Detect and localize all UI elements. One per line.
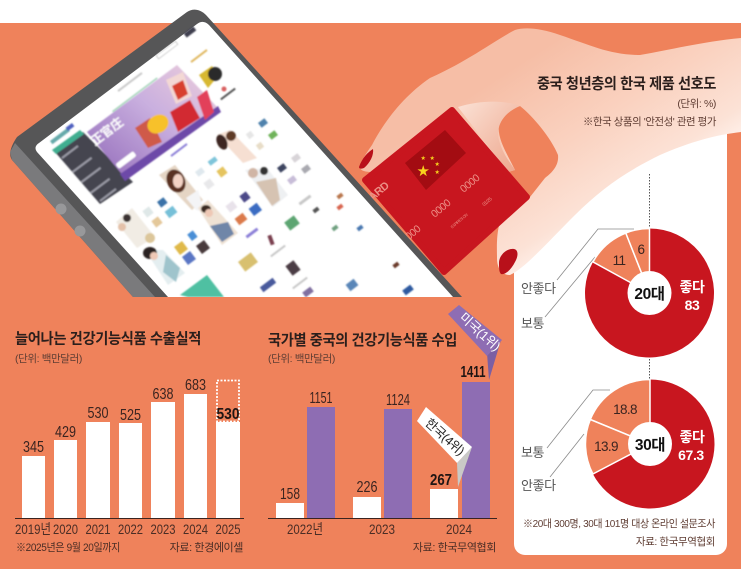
heading: preference: 중국 청년층의 한국 제품 선호도 <box>537 76 717 92</box>
bar values: exports: 345 <box>23 439 44 456</box>
category labels: 안좋다 <box>521 281 556 296</box>
slice: neutral 18.8 <box>590 380 650 444</box>
side buttons <box>56 204 66 214</box>
donut hole <box>628 422 672 466</box>
slice values: 67.3 <box>678 447 704 463</box>
green promo box <box>180 275 224 297</box>
screen contents <box>50 26 414 297</box>
card text: EXPIRES ON <box>450 212 469 229</box>
bar values: exports: 683 <box>185 377 206 394</box>
fingernails <box>359 149 373 169</box>
year labels: exports: 2021 <box>86 521 111 537</box>
product photos: packages <box>142 118 414 297</box>
card text: 0000 <box>458 172 483 195</box>
panel: exports chart <box>15 330 244 554</box>
unit: preference: (단위: %) <box>677 97 716 110</box>
donut: thirties <box>521 380 714 508</box>
bar values: imports: 158 <box>280 486 300 503</box>
slice: bad 13.9 <box>585 420 650 474</box>
slice values <box>613 242 705 313</box>
panel: preference heading <box>537 76 717 128</box>
featured product <box>199 66 218 88</box>
screen <box>36 22 453 297</box>
bars: Korea <box>276 489 458 518</box>
red credit card <box>365 110 527 272</box>
source: imports: 자료: 한국무역협회 <box>413 541 496 554</box>
bars: exports <box>22 394 240 518</box>
axis: imports <box>268 518 497 519</box>
hand <box>360 28 741 275</box>
card flag <box>405 130 466 190</box>
year labels: exports: 2022 <box>118 521 143 537</box>
bar values: imports: 1411 <box>460 364 486 381</box>
illustration: hand holding card <box>359 28 741 275</box>
panel: export chart background <box>0 297 514 569</box>
bar values: imports <box>280 364 486 503</box>
slice values: 11 <box>613 253 625 268</box>
tablet body <box>10 10 462 297</box>
dark category menu <box>55 132 133 204</box>
ribbon: USA rank 1: 미국(1위) <box>457 310 503 354</box>
card text <box>367 172 494 246</box>
card text: 0000 <box>399 223 424 246</box>
slice values: 좋다 <box>680 429 705 445</box>
ribbon: Korea rank 4 <box>417 407 472 487</box>
slice: neutral 11 <box>593 233 650 293</box>
year labels: exports: 2023 <box>150 521 176 537</box>
screen header <box>50 26 196 144</box>
center label: 20대 <box>634 285 665 303</box>
category labels: 보통 <box>521 445 545 460</box>
bars: USA <box>307 382 490 518</box>
illustration: tablet showing shopping site <box>10 10 462 297</box>
category labels <box>521 445 556 493</box>
ribbon: USA rank 1 <box>448 305 503 380</box>
bar values: exports: 429 <box>55 424 76 441</box>
bar values: exports: 530 <box>88 405 109 422</box>
folded finger <box>458 102 520 172</box>
bar values: exports <box>23 377 240 456</box>
leader lines: twenties <box>545 229 634 317</box>
dotted connector lines <box>648 174 650 379</box>
bar values: exports: 525 <box>120 407 141 424</box>
banner brand text: 正官庄 <box>86 112 126 149</box>
card flag: ★ <box>416 162 430 180</box>
year labels: imports: 2023 <box>369 521 395 537</box>
year labels: imports <box>287 521 472 537</box>
card flag: ★ <box>435 169 440 176</box>
bar values: exports: 638 <box>152 386 174 403</box>
panel: imports chart <box>268 305 503 554</box>
year labels: exports: 2024 <box>183 521 208 537</box>
note: preference: ※한국 상품의 '안전성' 관련 평가 <box>583 116 717 128</box>
year labels: exports: 2019년 <box>15 521 51 537</box>
category labels <box>521 281 556 331</box>
source: exports: 자료: 한경에이셀 <box>170 541 243 554</box>
leader lines: thirties <box>547 390 610 477</box>
purple banner <box>87 65 220 178</box>
card text: ARD <box>367 180 392 204</box>
ribbon: Korea rank 4: 한국(4위) <box>422 416 467 458</box>
heading: exports: 늘어나는 건강기능식품 수출실적 <box>15 330 201 348</box>
donut hole <box>628 271 672 315</box>
slice: good 83 <box>585 228 714 358</box>
source: survey: 자료: 한국무역협회 <box>636 535 715 548</box>
center label: 30대 <box>635 436 665 454</box>
slice values: 6 <box>638 242 645 257</box>
card text: 0000 <box>429 197 454 220</box>
bar values: imports: 267 <box>430 472 452 489</box>
footnote: survey: ※20대 300명, 30대 101명 대상 온라인 설문조사 <box>523 518 716 530</box>
slice values: 13.9 <box>594 439 618 454</box>
year labels: exports: 2025 <box>216 521 241 537</box>
card flag: ★ <box>421 155 426 162</box>
slice values: 83 <box>685 297 700 313</box>
slice values <box>594 402 705 463</box>
slice values: 18.8 <box>613 402 637 417</box>
white survey panel <box>514 110 727 555</box>
banner mascot <box>144 111 172 137</box>
slice values: 좋다 <box>680 279 705 295</box>
year labels: exports: 2020 <box>53 521 78 537</box>
dashed bar outline: full year <box>217 380 239 422</box>
unit: imports: (단위: 백만달러) <box>268 352 335 365</box>
bar values: imports: 226 <box>356 479 378 496</box>
axis: exports <box>15 518 244 519</box>
donut: twenties <box>521 228 714 358</box>
year labels: imports: 2022년 <box>287 521 323 537</box>
card flag: ★ <box>435 161 440 168</box>
year labels: imports: 2024 <box>446 521 472 537</box>
heading: imports: 국가별 중국의 건강기능식품 수입 <box>268 332 457 349</box>
bar values: exports: 530 <box>216 406 240 423</box>
bar values: imports: 1124 <box>386 392 410 409</box>
card text: 01/25 <box>481 196 494 208</box>
unit: exports: (단위: 백만달러) <box>15 352 82 365</box>
year labels: exports <box>15 521 241 537</box>
product photos: people <box>116 130 288 285</box>
card flag: ★ <box>430 155 435 162</box>
bar values: imports: 1151 <box>310 390 332 407</box>
category labels: 보통 <box>521 316 545 331</box>
footnote: exports: ※2025년은 9월 20일까지 <box>16 540 120 554</box>
slice: good 67.3 <box>593 380 714 508</box>
category labels: 안좋다 <box>521 478 556 493</box>
slice: bad 6 <box>626 228 650 293</box>
gap between fingers <box>499 106 558 197</box>
